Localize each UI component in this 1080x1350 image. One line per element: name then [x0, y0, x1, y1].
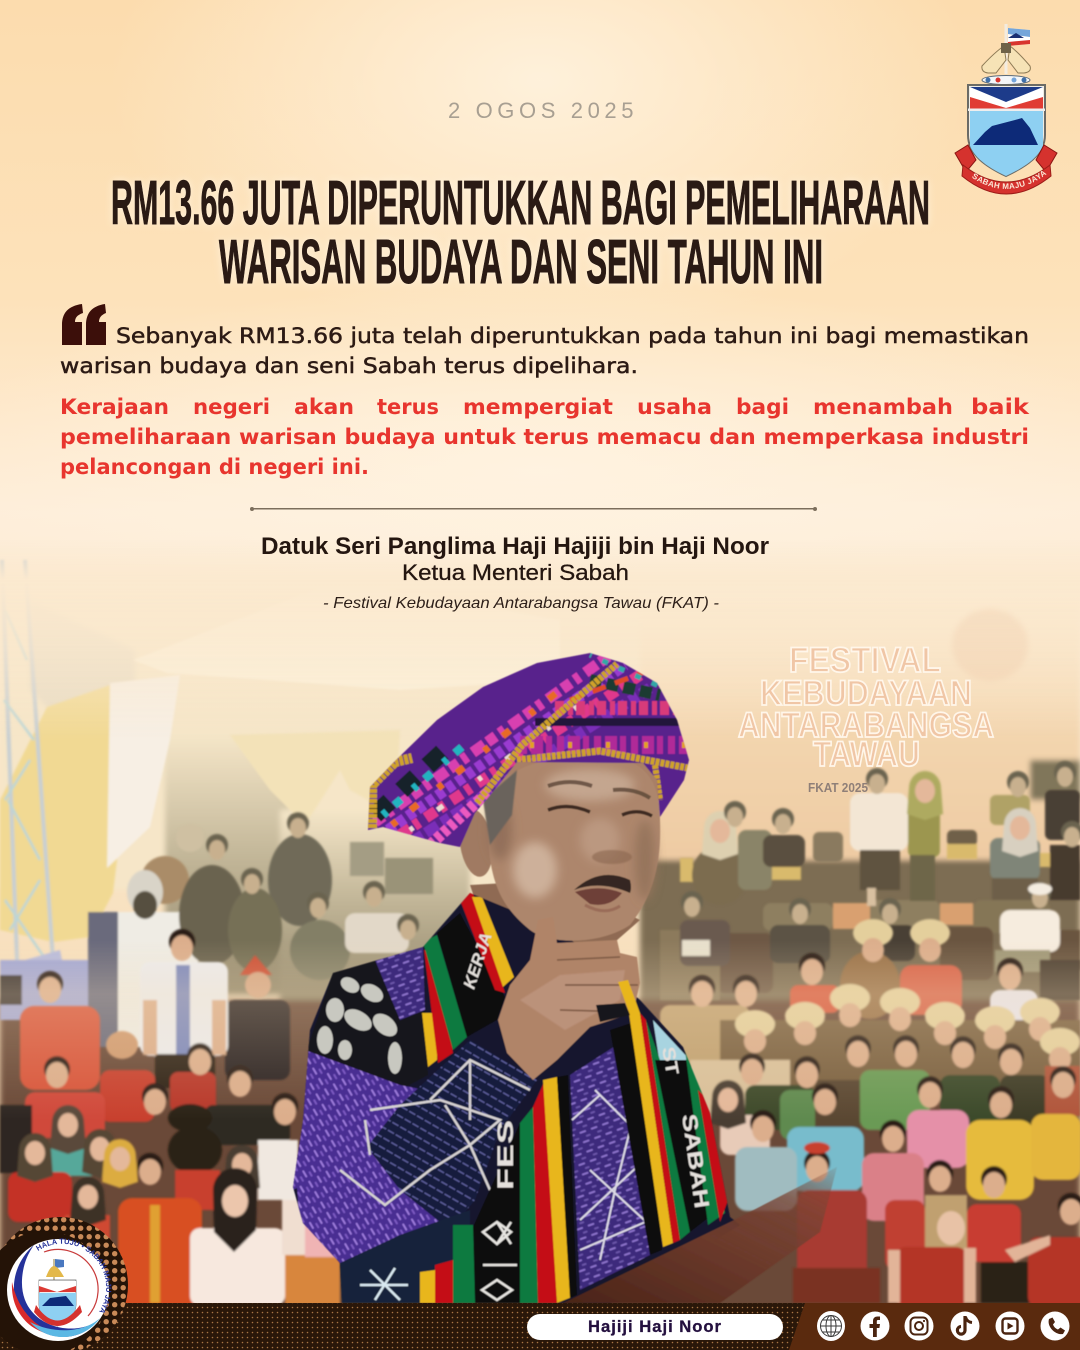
truss: [2, 560, 53, 960]
chest: [569, 1046, 653, 1290]
shirt: FES: [493, 1120, 518, 1190]
highlighted quote text: [60, 395, 1030, 480]
faded festival logo: FESTIVAL: [789, 641, 941, 680]
icon: quote mark: [62, 304, 106, 345]
faded festival logo: [738, 609, 1028, 795]
white box: [88, 912, 118, 1047]
divider: [250, 507, 817, 511]
left side figures: [225, 1000, 290, 1080]
dim openings: [165, 735, 290, 995]
faded festival logo: ANTARABANGSA: [738, 706, 994, 745]
highlighted quote text: pelancongan di negeri ini.: [60, 455, 369, 480]
ceiling: [0, 590, 640, 890]
highlighted quote text: menambah: [813, 395, 953, 420]
crowd front rows: [0, 919, 1080, 1307]
right middle rows: [840, 951, 900, 1019]
logo: Sabah coat of arms: SABAH MAJU JAYA: [972, 170, 1046, 189]
logo badge: [0, 1217, 128, 1350]
highlighted quote text: mempergiat: [463, 395, 613, 420]
row 2: [720, 1115, 770, 1155]
shirt: [290, 890, 740, 1310]
purple body sleeve: [293, 1050, 425, 1190]
neck: [470, 880, 640, 990]
front girls: [894, 1247, 968, 1307]
highlighted quote text: pemeliharaan warisan budaya untuk terus memacu dan memperkasa industri: [60, 425, 1029, 450]
icon: instagram: [904, 1312, 934, 1340]
icon: tiktok: [950, 1312, 980, 1340]
event name: - Festival Kebudayaan Antarabangsa Tawau (FKAT) -: [323, 595, 719, 612]
brows and eyes: [548, 782, 650, 798]
faded festival logo: FKAT 2025: [808, 780, 868, 795]
row 3: [735, 1147, 797, 1211]
icon: phone: [1040, 1312, 1070, 1340]
stage blue backdrop: [0, 960, 90, 1020]
hand: [498, 917, 640, 1080]
shirt: KERJA: [460, 930, 496, 991]
date: 2 OGOS 2025: [448, 98, 638, 123]
shirt: ST: [658, 1045, 683, 1076]
figure: speaker: [290, 645, 740, 1310]
seated audience right: [692, 845, 748, 905]
faded festival logo: TAWAU: [813, 735, 920, 774]
handle pill: Hajiji Haji Noor: [588, 1318, 722, 1336]
quote text: Sebanyak RM13.66 juta telah diperuntukkan pada tahun ini bagi memastikan: [116, 324, 1029, 349]
logo badge: HALA TUJU • SABAH MAJU JAYA: [36, 1238, 112, 1313]
handle pill: [527, 1314, 783, 1340]
turban: [367, 652, 690, 848]
footer bar: [0, 1303, 1080, 1350]
highlighted quote text: negeri: [193, 395, 270, 420]
fur hat row: [720, 1020, 1080, 1090]
highlighted quote text: Kerajaan: [60, 395, 169, 420]
nose shadow: [592, 850, 632, 864]
highlighted quote text: bagi: [736, 395, 789, 420]
icon: facebook: [860, 1312, 890, 1340]
moustache and mouth: [574, 875, 631, 893]
speaker name: Datuk Seri Panglima Haji Hajiji bin Haji Noor: [261, 533, 769, 560]
yellow curtain: [0, 685, 117, 942]
highlighted quote text: akan: [294, 395, 354, 420]
right sash: [653, 1020, 700, 1090]
title: [111, 169, 930, 297]
quote text: [60, 324, 1029, 379]
icon: youtube: [996, 1312, 1024, 1340]
icon: website: [817, 1311, 845, 1341]
podium: [563, 1167, 837, 1303]
logo: Sabah coat of arms: [954, 24, 1058, 194]
swag drapes: [133, 580, 560, 690]
photo background: venue: [0, 540, 1080, 1310]
highlighted quote text: usaha: [637, 395, 712, 420]
head: [455, 807, 497, 879]
lower sash: [473, 1123, 520, 1303]
quote text: warisan budaya dan seni Sabah terus dipelihara.: [60, 354, 638, 379]
upper sash: [422, 1013, 437, 1067]
top fade into background: [0, 540, 1080, 740]
light haze over crowd: [0, 940, 1080, 1120]
white curtain: [107, 675, 180, 868]
back crowd right: chairs: [813, 832, 843, 862]
highlighted quote text: baik: [971, 395, 1030, 420]
faded festival logo: KEBUDAYAAN: [760, 674, 972, 713]
highlighted quote text: terus: [377, 395, 439, 420]
shirt: SABAH: [677, 1112, 713, 1210]
row 1 dresses: [690, 1060, 790, 1120]
back crowd left: [141, 856, 189, 904]
speaker title: Ketua Menteri Sabah: [402, 560, 629, 585]
peach wall: [640, 600, 1080, 870]
black and white spots: [308, 961, 428, 1086]
